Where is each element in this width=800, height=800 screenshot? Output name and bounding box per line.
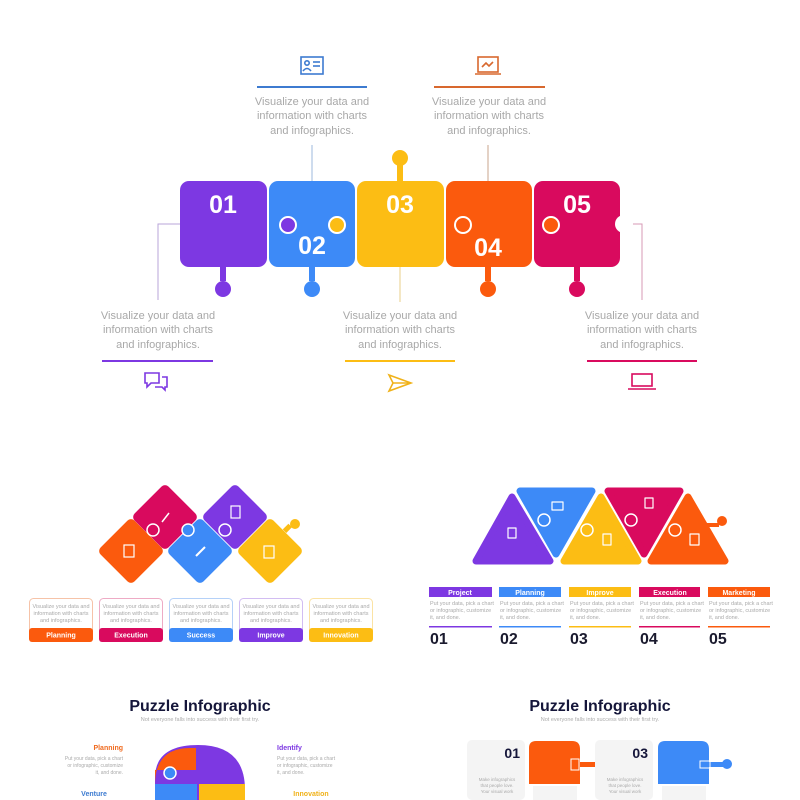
label Planning: it, and done. <box>95 770 123 776</box>
card 03: Make infographics <box>607 777 644 782</box>
diamond magenta <box>131 483 199 551</box>
label Innovation: Innovation <box>293 791 329 798</box>
text block: bottom 01: and infographics. <box>116 339 200 351</box>
puzzle piece 05 <box>534 181 633 297</box>
text block: bottom 01 <box>101 310 215 390</box>
puzzle piece 03: 03 <box>386 191 414 219</box>
card Planning: information with charts <box>33 611 89 617</box>
label Marketing: 05 <box>709 631 727 648</box>
panel: bottom-left puzzle infographic <box>65 698 336 800</box>
panel: triangle puzzle <box>476 491 727 561</box>
card 01: 01 <box>504 745 520 761</box>
puzzle piece 02: 02 <box>298 232 326 260</box>
label Improve: 03 <box>570 631 588 648</box>
text block: top 04 <box>432 57 546 137</box>
label Project: 01 <box>430 631 448 648</box>
card Execution: information with charts <box>103 611 159 617</box>
icon: laptop <box>628 374 656 389</box>
icons <box>508 498 699 545</box>
label Marketing: Put your data, pick a chart <box>709 601 773 607</box>
puzzle piece 05: 05 <box>563 191 591 219</box>
card 03: 03 <box>632 745 648 761</box>
connector lines <box>158 145 642 302</box>
label Planning <box>499 587 564 648</box>
icon: id card <box>301 57 323 74</box>
card 03: Your visual work <box>609 789 642 794</box>
knobs <box>538 514 727 536</box>
card Improve: and infographics. <box>250 618 292 624</box>
card Planning: Planning <box>46 632 76 640</box>
label Identify: it, and done. <box>277 770 305 776</box>
text block: bottom 03: information with charts <box>345 324 456 336</box>
card Success: Visualize your data and <box>172 604 230 610</box>
text block: bottom 05: information with charts <box>587 324 698 336</box>
card Improve: Improve <box>257 632 285 640</box>
label Project <box>429 587 494 648</box>
panel: bottom-right puzzle infographic: Not everyone falls into success with their first try. <box>541 717 660 723</box>
icon: chart board <box>475 57 501 74</box>
card Innovation <box>309 598 373 642</box>
label Planning: Planning <box>515 590 545 597</box>
triangle blue <box>520 491 592 554</box>
card Success <box>169 598 233 642</box>
text block: top 02: Visualize your data and <box>255 96 369 108</box>
card Planning <box>29 598 93 642</box>
card 03 <box>595 740 653 800</box>
label Planning: or infographic, customize <box>500 608 561 614</box>
card Execution: Execution <box>114 632 148 640</box>
text block: top 04: information with charts <box>434 110 545 122</box>
label Identify: Identify <box>277 745 302 752</box>
label Planning: Planning <box>93 745 123 752</box>
triangle magenta <box>608 491 680 554</box>
panel: diamond labels <box>29 598 373 642</box>
label Project: it, and done. <box>430 615 461 621</box>
card Execution: Visualize your data and <box>102 604 160 610</box>
heading: Puzzle Infographic <box>129 698 271 715</box>
label Execution <box>639 587 704 648</box>
text block: bottom 05: Visualize your data and <box>585 310 699 322</box>
panel: diamond puzzle <box>97 483 304 585</box>
text block: bottom 03: and infographics. <box>358 339 442 351</box>
puzzle head <box>155 745 245 800</box>
card 01 <box>467 740 525 800</box>
label Planning: 02 <box>500 631 518 648</box>
puzzle piece 01 <box>180 181 267 297</box>
diamond blue <box>166 517 234 585</box>
label Planning: or infographic, customize <box>67 763 123 769</box>
text block: bottom 05: and infographics. <box>600 339 684 351</box>
diamond orange <box>97 517 165 585</box>
label Identify: Put your data, pick a chart <box>277 756 336 762</box>
card Innovation: Innovation <box>323 632 359 640</box>
label Improve <box>569 587 634 648</box>
puzzle piece 01: 01 <box>209 191 237 219</box>
puzzle piece 04 <box>446 181 532 297</box>
card 01: Your visual work <box>481 789 514 794</box>
label Identify: or infographic, customize <box>277 763 333 769</box>
puzzle piece 02 <box>269 181 355 297</box>
icon: chat <box>145 373 167 390</box>
label Marketing: Marketing <box>722 590 756 597</box>
label Improve: it, and done. <box>570 615 601 621</box>
triangle purple <box>476 497 550 561</box>
card Success: Success <box>187 632 215 640</box>
panel: top puzzle row <box>158 145 642 302</box>
label Execution: or infographic, customize <box>640 608 701 614</box>
card Innovation: and infographics. <box>320 618 362 624</box>
triangle yellow <box>564 497 638 561</box>
label Planning: Put your data, pick a chart <box>65 756 124 762</box>
card 03: that people love. <box>608 783 642 788</box>
card Improve: information with charts <box>243 611 299 617</box>
panel: bottom-right puzzle infographic <box>467 698 732 800</box>
label Marketing: it, and done. <box>709 615 740 621</box>
puzzle piece 03 <box>357 150 444 267</box>
text block: top 02 <box>255 57 369 137</box>
triangle orange <box>651 497 725 561</box>
label Execution: 04 <box>640 631 658 648</box>
piece blue <box>658 741 732 800</box>
piece orange <box>529 741 607 800</box>
card Planning: Visualize your data and <box>32 604 90 610</box>
puzzle piece 04: 04 <box>474 234 502 262</box>
label Improve: Put your data, pick a chart <box>570 601 634 607</box>
label Execution: it, and done. <box>640 615 671 621</box>
diamond purple <box>201 483 269 551</box>
label Execution: Put your data, pick a chart <box>640 601 704 607</box>
label Venture: Venture <box>81 791 107 798</box>
label Marketing: or infographic, customize <box>709 608 770 614</box>
text block: top 04: and infographics. <box>447 125 531 137</box>
card Improve <box>239 598 303 642</box>
diamond yellow <box>236 517 304 585</box>
label Planning: it, and done. <box>500 615 531 621</box>
label Marketing <box>708 587 773 648</box>
text block: bottom 03 <box>343 310 457 391</box>
label Planning <box>65 745 124 776</box>
text block: bottom 01: Visualize your data and <box>101 310 215 322</box>
text block: top 02: information with charts <box>257 110 368 122</box>
label Planning: Put your data, pick a chart <box>500 601 564 607</box>
icon: paper plane <box>389 375 411 391</box>
label Project: Put your data, pick a chart <box>430 601 494 607</box>
label Improve: or infographic, customize <box>570 608 631 614</box>
label Identify <box>277 745 336 776</box>
card Innovation: information with charts <box>313 611 369 617</box>
card Success: and infographics. <box>180 618 222 624</box>
panel: triangle labels <box>429 587 773 648</box>
heading: Puzzle Infographic <box>529 698 671 715</box>
text block: bottom 05 <box>585 310 699 389</box>
label Project: or infographic, customize <box>430 608 491 614</box>
card Innovation: Visualize your data and <box>312 604 370 610</box>
card 01: that people love. <box>480 783 514 788</box>
card Success: information with charts <box>173 611 229 617</box>
card 01: Make infographics <box>479 777 516 782</box>
card Execution: and infographics. <box>110 618 152 624</box>
label Improve: Improve <box>586 590 614 597</box>
text block: top 02: and infographics. <box>270 125 354 137</box>
panel: bottom-left puzzle infographic: Not everyone falls into success with their first try. <box>141 717 260 723</box>
text block: bottom 03: Visualize your data and <box>343 310 457 322</box>
text block: bottom 01: information with charts <box>103 324 214 336</box>
label Project: Project <box>448 590 473 597</box>
card Improve: Visualize your data and <box>242 604 300 610</box>
card Execution <box>99 598 163 642</box>
label Execution: Execution <box>653 590 687 597</box>
card Planning: and infographics. <box>40 618 82 624</box>
text block: top 04: Visualize your data and <box>432 96 546 108</box>
joint knobs <box>280 217 559 233</box>
